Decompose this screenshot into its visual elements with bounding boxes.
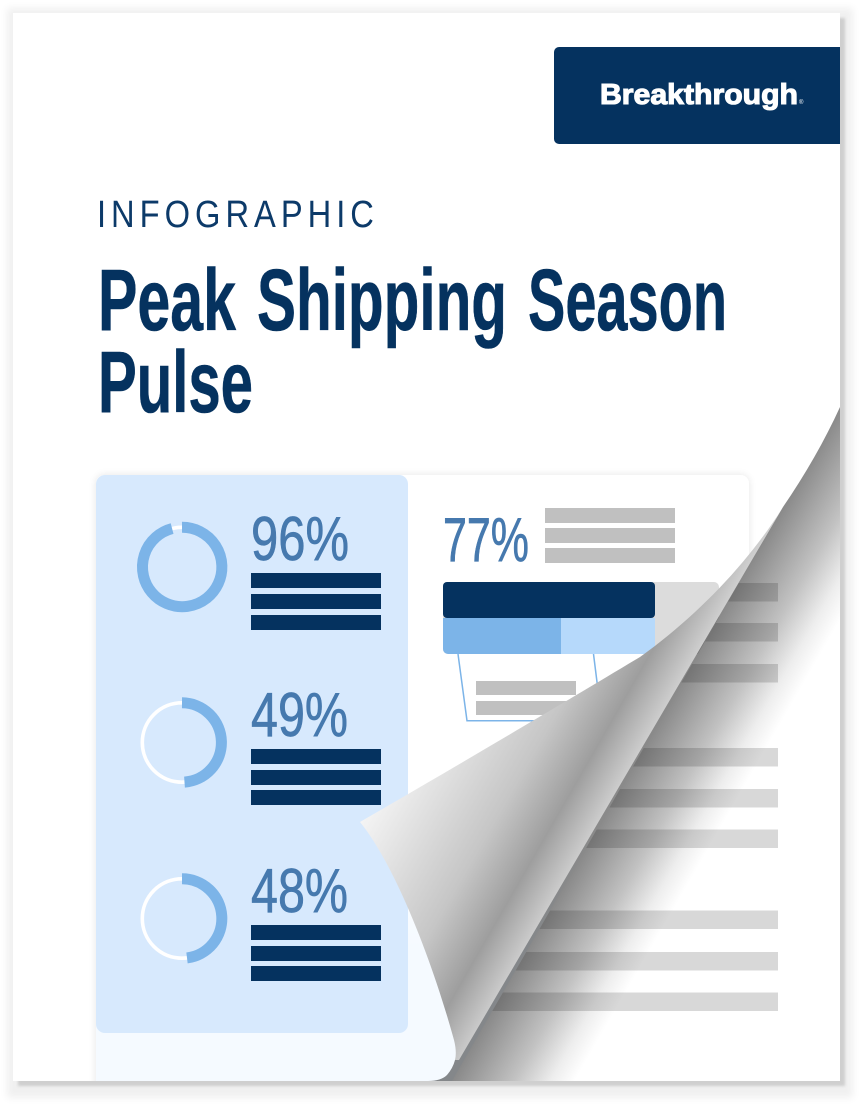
page curl flap — [360, 507, 783, 1060]
next page revealed under the curl — [492, 583, 778, 1081]
stat: 96%: 96% — [251, 505, 349, 574]
title: Shipping — [257, 252, 507, 349]
curl cast shadow — [428, 407, 840, 1081]
stat: 96% — [251, 505, 381, 630]
title: Pulse — [98, 334, 253, 431]
stat: 48% — [251, 857, 381, 981]
logo badge: ® — [799, 99, 804, 106]
stat: 77% — [443, 506, 675, 575]
eyebrow label: INFOGRAPHIC — [97, 193, 374, 236]
stacked bar chart — [443, 582, 719, 721]
report card — [96, 475, 749, 1109]
stat: 49%: 49% — [251, 681, 348, 750]
title: Peak — [98, 252, 236, 349]
stat: 49% — [251, 681, 381, 805]
donut: 96% — [142, 527, 222, 607]
title — [98, 252, 727, 431]
logo badge — [554, 47, 840, 144]
stat: 77%: 77% — [443, 506, 529, 575]
donut: 48% — [142, 879, 222, 958]
panel: light blue statistics — [96, 475, 408, 1033]
title: Season — [528, 252, 727, 349]
donut: 49% — [142, 703, 222, 782]
logo badge: Breakthrough — [600, 79, 798, 111]
stat: 48%: 48% — [251, 857, 348, 926]
